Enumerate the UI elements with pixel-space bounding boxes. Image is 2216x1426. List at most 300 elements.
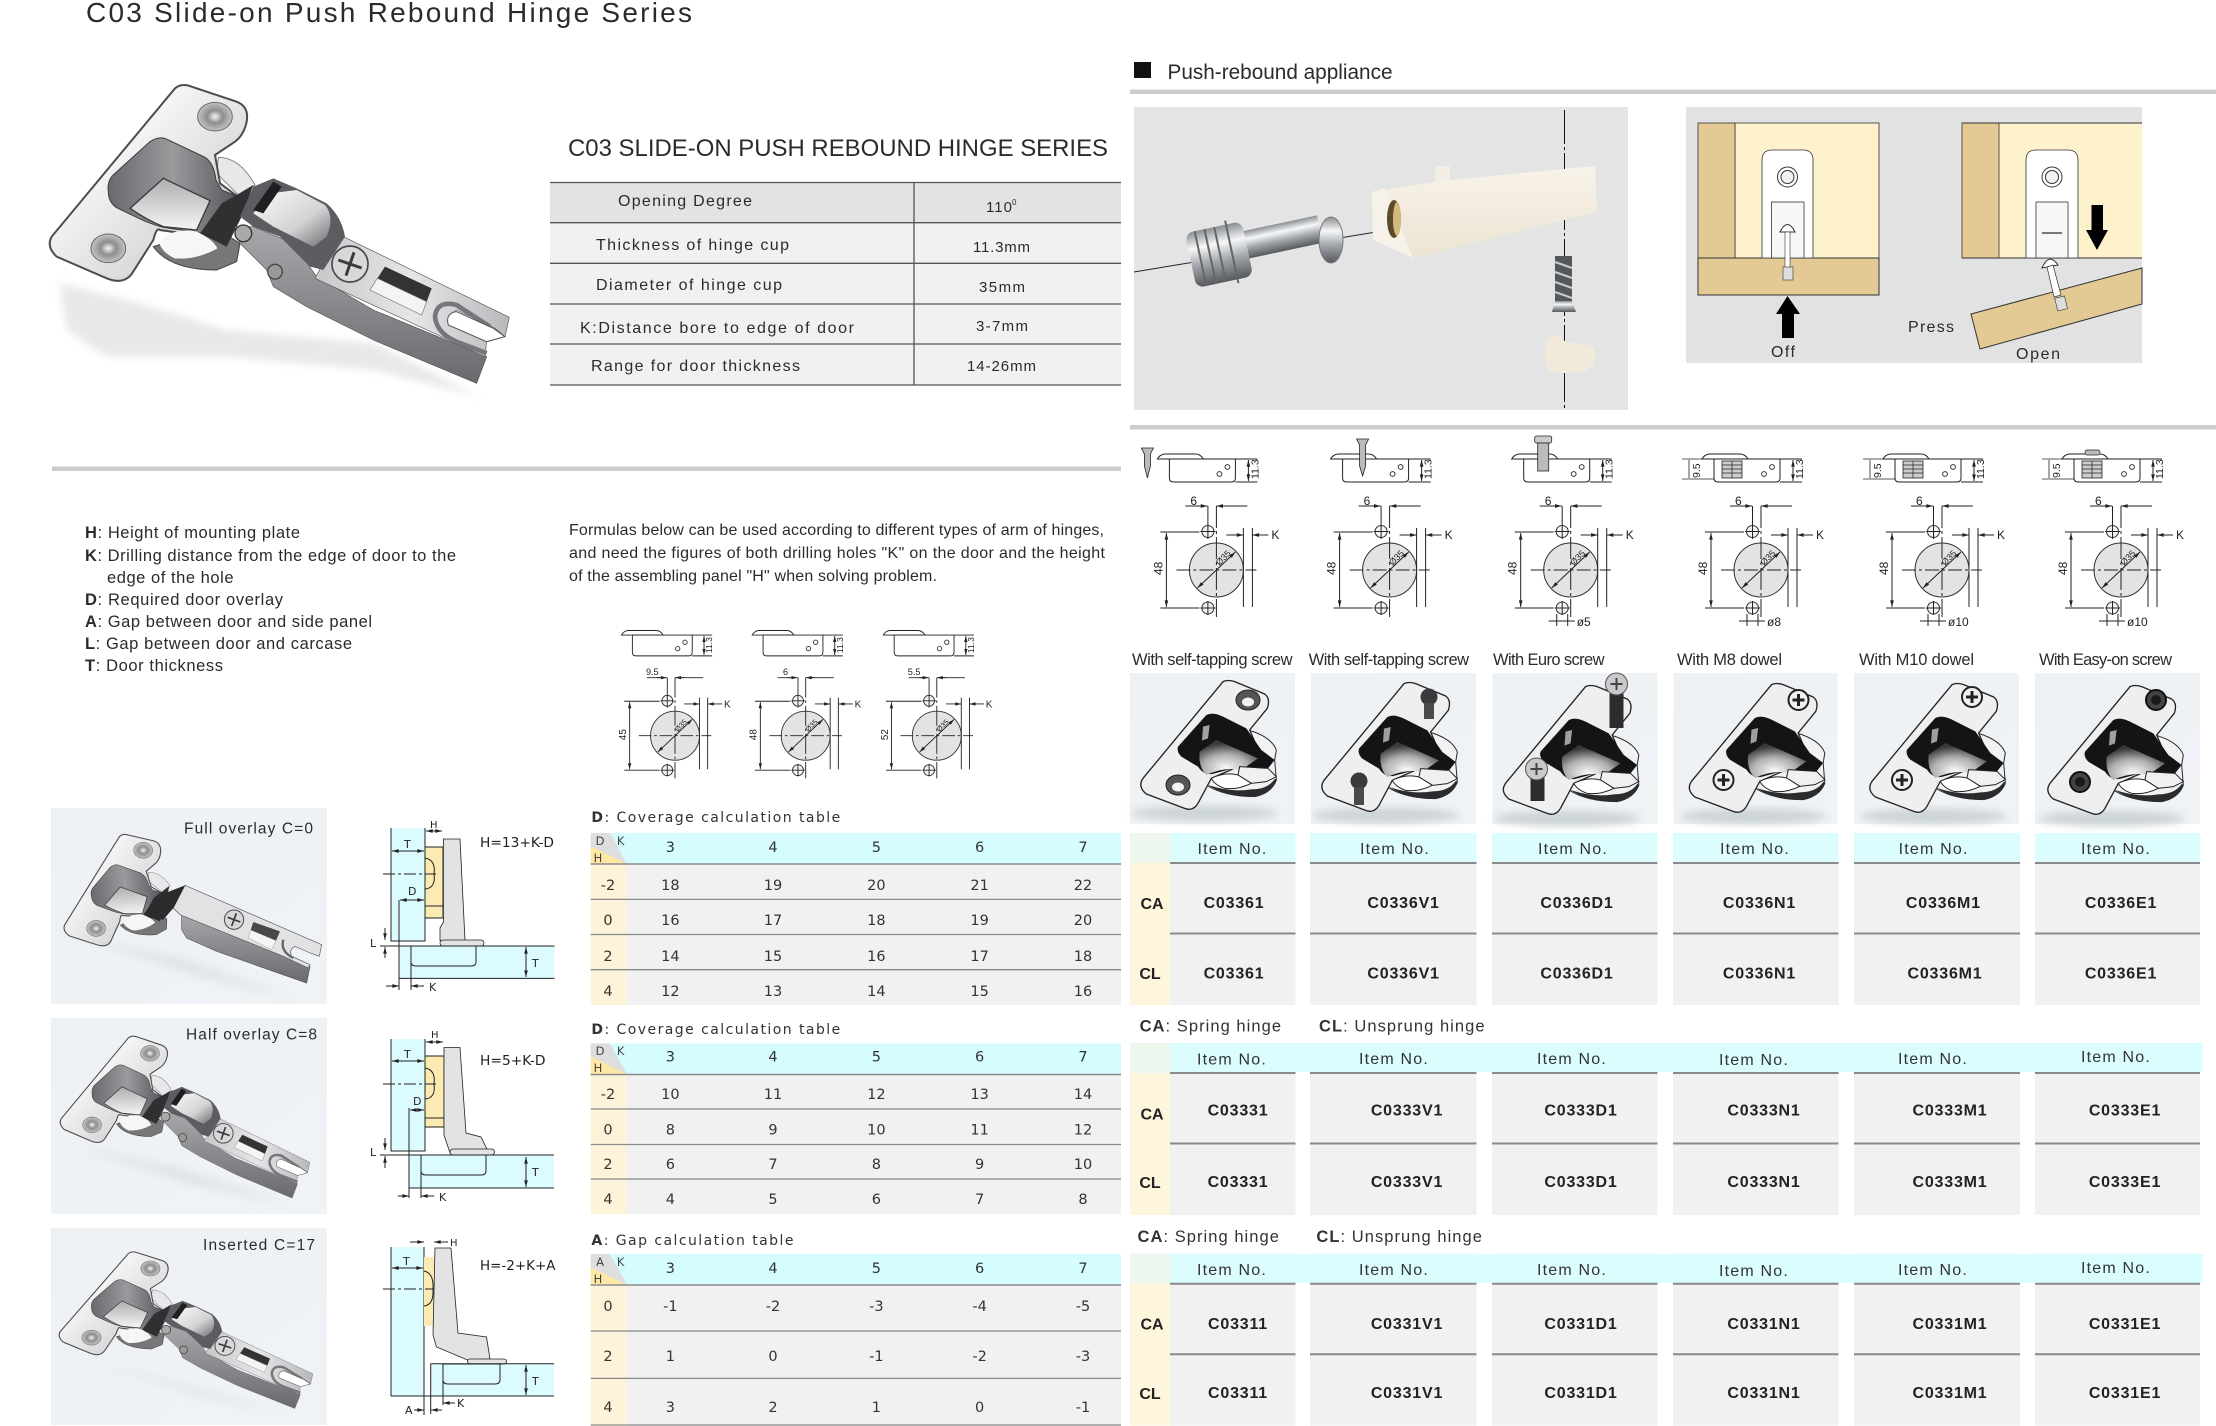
- table: gap inserted: -5: [1076, 1299, 1090, 1315]
- table: coverage full overlay: 15: [764, 949, 782, 965]
- item table: C0336 series: Item No.: [1360, 841, 1430, 858]
- item table: C0336 series: C0336M1: [1908, 966, 1982, 982]
- table: coverage full overlay: 5: [872, 840, 881, 856]
- item table: C0331 series: [1130, 1254, 2203, 1426]
- legend: CA and CL: [1140, 1017, 1486, 1035]
- table heading: D: Coverage calculation table: [591, 1022, 842, 1038]
- drilling diagram: Easy-on screw: Ø35: [2118, 548, 2137, 567]
- table: coverage half overlay: 7: [768, 1157, 778, 1173]
- panel: inserted photo: [51, 1228, 327, 1425]
- section diagram: inserted: T: [402, 1255, 410, 1268]
- section diagram: full overlay: D: [408, 885, 416, 898]
- table: gap inserted: 4: [603, 1400, 613, 1416]
- table: coverage half overlay: 2: [603, 1157, 613, 1173]
- drilling diagram: Easy-on screw: K: [2176, 528, 2184, 542]
- item table: C0331 series: C03311: [1208, 1316, 1268, 1333]
- table: coverage full overlay: 20: [1074, 913, 1092, 929]
- item table: C0333 series: Item No.: [1359, 1051, 1429, 1068]
- drilling diagram: 48: 11.3: [835, 637, 845, 653]
- drilling diagram: self-tapping screw 2: 6: [1364, 494, 1371, 508]
- table: coverage full overlay: 19: [764, 878, 782, 894]
- formula: H=5+K-D: [480, 1054, 546, 1069]
- drilling diagram: 45: Ø35: [673, 717, 689, 733]
- spec table: Opening Degree: [618, 193, 752, 210]
- table: coverage half overlay: 4: [768, 1050, 778, 1066]
- table: coverage full overlay: 6: [975, 840, 984, 856]
- table: gap inserted: 2: [603, 1349, 613, 1365]
- drilling diagram: M8 dowel: [1682, 454, 1824, 629]
- table: gap inserted: -2: [766, 1299, 780, 1315]
- section diagram: inserted: A: [405, 1404, 413, 1417]
- table: coverage full overlay: 14: [867, 984, 886, 1000]
- drilling diagram: 52: Ø35: [935, 717, 951, 733]
- icon: plastic rebound body: [1372, 166, 1597, 258]
- item table: C0331 series: C0331E1: [2089, 1385, 2161, 1402]
- drilling diagram: 45: K: [724, 700, 731, 711]
- item table: C0333 series: C0333D1: [1544, 1103, 1618, 1120]
- mounting plate photo: Euro screws: [1492, 673, 1658, 826]
- item table: C0331 series: C0331N1: [1727, 1385, 1801, 1402]
- table: coverage half overlay: 4: [603, 1192, 613, 1208]
- legend: CA and CL: CA: Spring hinge: [1140, 1017, 1282, 1035]
- drilling diagram: self-tapping screw 1: 6: [1190, 494, 1197, 508]
- table: coverage half overlay: 5: [768, 1192, 778, 1208]
- drilling diagram: Euro screw: K: [1626, 528, 1634, 542]
- spec table: 3-7mm: [976, 318, 1028, 335]
- definitions list: [85, 524, 456, 675]
- table: coverage full overlay: 19: [970, 913, 989, 929]
- drilling diagram: Euro screw: ø5: [1577, 615, 1591, 629]
- item table: C0333 series: C0333V1: [1371, 1174, 1443, 1191]
- item table: C0333 series: C03331: [1208, 1103, 1268, 1120]
- item table: C0336 series: C0336D1: [1540, 966, 1614, 982]
- spec table: 11.3mm: [973, 239, 1030, 256]
- item table: C0331 series: C0331V1: [1371, 1385, 1443, 1402]
- drilling diagram: Easy-on screw: 48: [2056, 561, 2070, 575]
- table: coverage half overlay: H: [594, 1061, 602, 1075]
- drilling diagram: M10 dowel: ø10: [1948, 615, 1969, 629]
- table: coverage full overlay: D: [596, 834, 605, 848]
- mounting plate photo: M8 dowel: [1674, 673, 1838, 824]
- item table: C0331 series: CL: [1139, 1386, 1161, 1403]
- mounting plate captions: [1132, 651, 2172, 669]
- item table: C0333 series: CA: [1140, 1107, 1164, 1124]
- table: coverage half overlay: 9: [975, 1157, 984, 1173]
- drilling diagram: M8 dowel: Ø35: [1758, 548, 1777, 567]
- table: gap inserted: -1: [869, 1349, 884, 1365]
- item table: C0336 series: Item No.: [1899, 841, 1969, 858]
- drilling diagram: self-tapping screw 2: K: [1445, 528, 1453, 542]
- definitions list: D: Required door overlay: [85, 591, 284, 609]
- table: coverage half overlay: 14: [1074, 1087, 1092, 1103]
- drilling diagram: Euro screw: 48: [1506, 561, 1520, 575]
- formulas note: [569, 522, 1106, 585]
- formula: H=-2+K+A: [480, 1259, 556, 1274]
- table: gap inserted: 0: [975, 1400, 984, 1416]
- section diagram: half overlay: D: [413, 1095, 421, 1108]
- table: coverage full overlay: 15: [970, 984, 989, 1000]
- section diagram: inserted: K: [457, 1397, 465, 1410]
- mounting plate photo: countersunk holes: [1130, 673, 1295, 824]
- table: coverage full overlay: -2: [601, 878, 615, 894]
- drilling diagram: M10 dowel: 9.5: [1872, 463, 1884, 478]
- drilling diagram: Euro screw: 6: [1545, 494, 1552, 508]
- table: gap inserted: -1: [663, 1299, 678, 1315]
- item table: C0336 series: Item No.: [1720, 841, 1790, 858]
- drilling diagram: 45: [618, 630, 731, 778]
- panel: half overlay photo: [51, 1018, 327, 1214]
- table: coverage half overlay: 5: [872, 1050, 881, 1066]
- item table: C0331 series: Item No.: [1898, 1262, 1968, 1279]
- label: Press: Press: [1908, 319, 1954, 336]
- drilling diagram: Easy-on screw: ø10: [2127, 615, 2148, 629]
- drilling diagram: M8 dowel: 6: [1735, 494, 1742, 508]
- table: coverage half overlay: 3: [666, 1050, 675, 1066]
- item table: C0333 series: Item No.: [1197, 1052, 1267, 1069]
- icon: metal dowel: [1184, 202, 1343, 292]
- drilling diagram: M10 dowel: 11.3: [1975, 459, 1987, 479]
- mounting plate captions: With M8 dowel: [1677, 651, 1782, 669]
- drilling diagram: M10 dowel: 48: [1877, 561, 1891, 575]
- section heading: push-rebound appliance: Push-rebound appliance: [1168, 61, 1392, 84]
- table: gap inserted: A: [596, 1255, 604, 1269]
- item table: C0333 series: C0333V1: [1371, 1103, 1443, 1120]
- table: coverage full overlay: 16: [867, 949, 886, 965]
- drilling diagram: 48: K: [855, 700, 862, 711]
- main hinge photo: [50, 85, 509, 397]
- item table: C0336 series: C0336D1: [1540, 895, 1614, 912]
- table: gap inserted: 1: [666, 1349, 675, 1365]
- table: coverage half overlay: 6: [872, 1192, 881, 1208]
- table: coverage half overlay: 8: [666, 1122, 675, 1138]
- item table: C0336 series: C0336V1: [1367, 895, 1440, 912]
- item table: C0333 series: C03331: [1208, 1174, 1268, 1191]
- table: coverage full overlay: 20: [867, 878, 886, 894]
- item table: C0336 series: C0336N1: [1723, 966, 1796, 982]
- drilling diagram: M10 dowel: Ø35: [1939, 548, 1958, 567]
- section diagram: inserted: [383, 1238, 556, 1417]
- table: coverage full overlay: 4: [768, 840, 778, 856]
- item table: C0331 series: Item No.: [1537, 1262, 1607, 1279]
- section diagram: half overlay: H: [431, 1030, 439, 1041]
- item table: C0336 series: C0336E1: [2085, 966, 2157, 982]
- drilling diagram: M10 dowel: K: [1997, 528, 2005, 542]
- table: gap inserted: K: [617, 1255, 625, 1269]
- table: coverage half overlay: 12: [1074, 1122, 1092, 1138]
- appliance exploded photo: [1134, 107, 1628, 410]
- item table: C0333 series: C0333N1: [1727, 1103, 1801, 1120]
- mounting plate captions: With Euro screw: [1493, 651, 1605, 669]
- spec table: Range for door thickness: [591, 358, 800, 375]
- item table: C0333 series: Item No.: [1537, 1051, 1607, 1068]
- item table: C0336 series: Item No.: [1538, 841, 1608, 858]
- drilling diagram: self-tapping screw 1: [1141, 448, 1279, 617]
- drilling diagram: 52: 11.3: [966, 637, 976, 653]
- table: coverage half overlay: 8: [872, 1157, 881, 1173]
- table: coverage half overlay: 10: [661, 1087, 680, 1103]
- table: coverage half overlay: D: [596, 1044, 605, 1058]
- table: coverage half overlay: 11: [970, 1122, 989, 1138]
- table: coverage full overlay: 12: [661, 984, 680, 1000]
- drilling diagram: self-tapping screw 2: [1325, 439, 1453, 617]
- spec table: Diameter of hinge cup: [596, 277, 782, 294]
- table: gap inserted: 0: [603, 1299, 613, 1315]
- table: coverage half overlay: 0: [603, 1122, 613, 1138]
- item table: C0333 series: C0333E1: [2089, 1103, 2161, 1120]
- item table: C0333 series: CL: [1139, 1175, 1161, 1192]
- table: gap inserted: 3: [666, 1400, 675, 1416]
- drilling diagram: Euro screw: Ø35: [1568, 548, 1587, 567]
- item table: C0336 series: C0336E1: [2085, 895, 2157, 912]
- drilling diagram: 45: 11.3: [704, 637, 714, 653]
- section diagram: half overlay: L: [370, 1146, 377, 1159]
- table: gap inserted: 4: [768, 1261, 778, 1277]
- table: gap inserted: 5: [872, 1261, 881, 1277]
- drilling diagram: 48: 6: [783, 667, 788, 677]
- table: gap inserted: -3: [1076, 1349, 1090, 1365]
- table: coverage half overlay: [591, 1022, 1121, 1214]
- drilling diagram: self-tapping screw 1: Ø35: [1214, 548, 1233, 567]
- formulas note: of the assembling panel "H" when solving problem.: [569, 568, 937, 585]
- definitions list: L: Gap between door and carcase: [85, 635, 352, 653]
- item table: C0331 series: Item No.: [1359, 1262, 1429, 1279]
- item table: C0331 series: Item No.: [2081, 1260, 2151, 1277]
- table: coverage half overlay: 11: [764, 1087, 782, 1103]
- table: coverage half overlay: 12: [867, 1087, 886, 1103]
- diagram: off state: [1698, 123, 1879, 361]
- table: coverage full overlay: 18: [867, 913, 886, 929]
- table: coverage half overlay: 6: [975, 1050, 984, 1066]
- drilling diagram: Easy-on screw: 9.5: [2051, 463, 2063, 478]
- drilling diagram: M8 dowel: 48: [1696, 561, 1710, 575]
- table: gap inserted: 2: [768, 1400, 778, 1416]
- item table: C0336 series: CL: [1139, 966, 1161, 983]
- drilling diagram: M8 dowel: 11.3: [1794, 459, 1806, 479]
- table heading: A: Gap calculation table: [591, 1233, 795, 1249]
- item table: C0336 series: C03361: [1204, 966, 1264, 982]
- table: gap inserted: 3: [666, 1261, 675, 1277]
- definitions list: H: Height of mounting plate: [85, 524, 300, 542]
- formula: H=13+K-D: [480, 836, 554, 851]
- item table: C0333 series: [1130, 1043, 2203, 1215]
- item table: C0333 series: Item No.: [1898, 1051, 1968, 1068]
- item table: C0331 series: C0331V1: [1371, 1316, 1443, 1333]
- table: coverage full overlay: 3: [666, 840, 675, 856]
- item table: C0333 series: Item No.: [1719, 1052, 1789, 1069]
- item table: C0336 series: C0336V1: [1367, 966, 1440, 982]
- section diagram: full overlay: T: [531, 957, 539, 970]
- label: Half overlay: Half overlay C=8: [186, 1026, 317, 1044]
- table: coverage half overlay: 7: [975, 1192, 984, 1208]
- spec table: 35mm: [979, 279, 1025, 296]
- section diagram: full overlay: K: [429, 981, 437, 994]
- item table: C0336 series: [1130, 833, 2200, 1005]
- table: coverage full overlay: 7: [1078, 840, 1088, 856]
- section diagram: full overlay: H: [430, 820, 438, 831]
- item table: C0336 series: Item No.: [2081, 841, 2151, 858]
- section diagram: inserted: H: [450, 1238, 458, 1249]
- item table: C0331 series: C0331D1: [1544, 1385, 1618, 1402]
- table: coverage full overlay: 4: [603, 984, 613, 1000]
- item table: C0331 series: C03311: [1208, 1385, 1268, 1402]
- section diagram: half overlay: T: [531, 1166, 539, 1179]
- drilling diagram: 45: 45: [618, 729, 629, 740]
- item table: C0333 series: C0333D1: [1544, 1174, 1618, 1191]
- section diagram: full overlay: T: [403, 838, 411, 851]
- item table: C0331 series: C0331M1: [1913, 1316, 1987, 1333]
- drilling diagram: 52: K: [986, 700, 993, 711]
- table: coverage half overlay: K: [617, 1044, 625, 1058]
- table: gap inserted: -1: [1076, 1400, 1090, 1416]
- drilling diagram: M8 dowel: K: [1816, 528, 1824, 542]
- table: coverage half overlay: 8: [1078, 1192, 1088, 1208]
- label: Full overlay: Full overlay C=0: [184, 820, 313, 838]
- table: coverage half overlay: -2: [601, 1087, 615, 1103]
- table: coverage full overlay: 21: [970, 878, 989, 894]
- mounting plate photo: Easy-on screw: [2035, 673, 2200, 826]
- drilling diagram: 52: 5.5: [908, 667, 920, 677]
- definitions list: T: Door thickness: [85, 657, 223, 675]
- drilling diagram: self-tapping screw 2: 11.3: [1423, 459, 1435, 479]
- table: gap inserted: H: [594, 1272, 602, 1286]
- item table: C0331 series: CA: [1140, 1316, 1164, 1334]
- spec table: 110: [986, 199, 1012, 216]
- spec table: 0: [1012, 198, 1017, 207]
- table: gap inserted: -4: [972, 1299, 987, 1315]
- drilling diagram: self-tapping screw 2: 48: [1325, 561, 1339, 575]
- formulas note: Formulas below can be used according to different types of arm of hinges,: [569, 522, 1104, 539]
- table: coverage full overlay: 17: [764, 913, 782, 929]
- definitions list: edge of the hole: [107, 569, 234, 587]
- item table: C0331 series: Item No.: [1197, 1262, 1267, 1279]
- table: coverage full overlay: 22: [1074, 878, 1092, 894]
- item table: C0331 series: C0331D1: [1544, 1316, 1618, 1333]
- section diagram: inserted: T: [531, 1375, 539, 1388]
- panel: full overlay photo: [51, 808, 327, 1004]
- drilling diagram: Easy-on screw: 11.3: [2154, 459, 2166, 479]
- drilling diagram: 52: [880, 630, 993, 778]
- legend: CA and CL second: CL: Unsprung hinge: [1316, 1228, 1483, 1246]
- drilling diagram: self-tapping screw 1: 11.3: [1249, 459, 1261, 479]
- mounting plate captions: With Easy-on screw: [2039, 651, 2172, 669]
- item table: C0336 series: CA: [1140, 896, 1164, 913]
- drilling diagram: self-tapping screw 1: 48: [1151, 561, 1165, 575]
- table: coverage half overlay: 4: [666, 1192, 675, 1208]
- item table: C0333 series: C0333E1: [2089, 1174, 2161, 1191]
- item table: C0336 series: C0336M1: [1906, 895, 1981, 912]
- table: gap inserted: [591, 1233, 1121, 1426]
- mounting plate photo: M10 dowel: [1854, 673, 2019, 824]
- icon: plastic plug: [1546, 335, 1595, 373]
- item table: C0333 series: Item No.: [2081, 1049, 2151, 1066]
- table: gap inserted: 6: [975, 1261, 984, 1277]
- item table: C0333 series: C0333N1: [1727, 1174, 1801, 1191]
- drilling diagram: M8 dowel: ø8: [1767, 615, 1781, 629]
- table: gap inserted: -2: [972, 1349, 987, 1365]
- section diagram: full overlay: [370, 820, 554, 994]
- item table: C0331 series: C0331E1: [2089, 1316, 2161, 1333]
- table: coverage full overlay: K: [617, 834, 625, 848]
- table: gap inserted: 1: [872, 1400, 881, 1416]
- drilling diagram: Euro screw: [1506, 436, 1634, 629]
- spec table: [550, 135, 1121, 385]
- definitions list: K: Drilling distance from the edge of door to the: [85, 547, 456, 565]
- table: coverage full overlay: 17: [970, 949, 989, 965]
- spec table: Thickness of hinge cup: [596, 237, 789, 254]
- table: coverage full overlay: 14: [661, 949, 680, 965]
- item table: C0333 series: C0333M1: [1913, 1174, 1987, 1191]
- section diagram: half overlay: K: [439, 1191, 447, 1204]
- item table: C0336 series: C03361: [1204, 895, 1264, 912]
- table: coverage half overlay: 6: [666, 1157, 675, 1173]
- item table: C0331 series: Item No.: [1719, 1263, 1789, 1280]
- definitions list: A: Gap between door and side panel: [85, 613, 372, 631]
- spec heading: C03 SLIDE-ON PUSH REBOUND HINGE SERIES: [568, 135, 1108, 162]
- table: coverage full overlay: 16: [1074, 984, 1092, 1000]
- drilling diagram: Easy-on screw: [2042, 450, 2184, 629]
- legend: CA and CL second: [1138, 1228, 1483, 1246]
- table: coverage full overlay: 0: [603, 913, 613, 929]
- table: gap inserted: 0: [768, 1349, 778, 1365]
- table: coverage half overlay: 7: [1078, 1050, 1088, 1066]
- mounting plate photo: small screws: [1311, 673, 1476, 824]
- table: coverage full overlay: 18: [661, 878, 680, 894]
- drilling diagram: self-tapping screw 1: K: [1271, 528, 1279, 542]
- drilling diagram: M10 dowel: [1863, 454, 2005, 629]
- table: coverage full overlay: 16: [661, 913, 680, 929]
- section diagram: full overlay: L: [370, 937, 377, 950]
- drilling diagram: 48: 48: [749, 729, 760, 740]
- table: coverage full overlay: H: [594, 851, 602, 865]
- label: Open: Open: [2016, 346, 2060, 363]
- table: coverage half overlay: 9: [768, 1122, 778, 1138]
- drilling diagram: M8 dowel: 9.5: [1691, 463, 1703, 478]
- legend: CA and CL: CL: Unsprung hinge: [1319, 1017, 1486, 1035]
- drilling diagram: 52: 52: [880, 729, 891, 740]
- spec table: K:Distance bore to edge of door: [580, 320, 855, 337]
- table: coverage full overlay: 2: [603, 949, 613, 965]
- formulas note: and need the figures of both drilling holes "K" on the door and the height: [569, 545, 1106, 562]
- section diagram: half overlay: T: [403, 1048, 411, 1061]
- spec table: 14-26mm: [967, 358, 1036, 375]
- table: coverage full overlay: 13: [764, 984, 782, 1000]
- mounting plate captions: With self-tapping screw: [1132, 651, 1293, 669]
- operation diagram: off and open: [1686, 107, 2142, 363]
- label: Off: Off: [1771, 344, 1796, 361]
- section diagram: half overlay: [370, 1030, 554, 1204]
- table: coverage half overlay: 10: [1074, 1157, 1092, 1173]
- table: gap inserted: 7: [1078, 1261, 1088, 1277]
- drilling diagram: self-tapping screw 2: Ø35: [1387, 548, 1406, 567]
- table: coverage full overlay: 18: [1074, 949, 1092, 965]
- mounting plate captions: With self-tapping screw: [1309, 651, 1469, 669]
- label: Inserted: Inserted C=17: [203, 1237, 315, 1254]
- item table: C0331 series: C0331N1: [1727, 1316, 1801, 1333]
- mounting plate captions: With M10 dowel: [1859, 651, 1974, 669]
- drilling diagram: Euro screw: 11.3: [1604, 459, 1616, 479]
- drilling diagram: Easy-on screw: 6: [2095, 494, 2102, 508]
- table: coverage half overlay: 13: [970, 1087, 989, 1103]
- item table: C0336 series: C0336N1: [1723, 895, 1796, 912]
- drilling diagram: 48: [749, 630, 862, 778]
- icon: screw: [1552, 256, 1576, 312]
- table: coverage full overlay: [591, 810, 1121, 1005]
- legend: CA and CL second: CA: Spring hinge: [1138, 1228, 1280, 1246]
- drilling diagram: 48: Ø35: [803, 717, 820, 733]
- item table: C0331 series: C0331M1: [1913, 1385, 1987, 1402]
- table heading: D: Coverage calculation table: [591, 810, 842, 826]
- table: gap inserted: -3: [869, 1299, 884, 1315]
